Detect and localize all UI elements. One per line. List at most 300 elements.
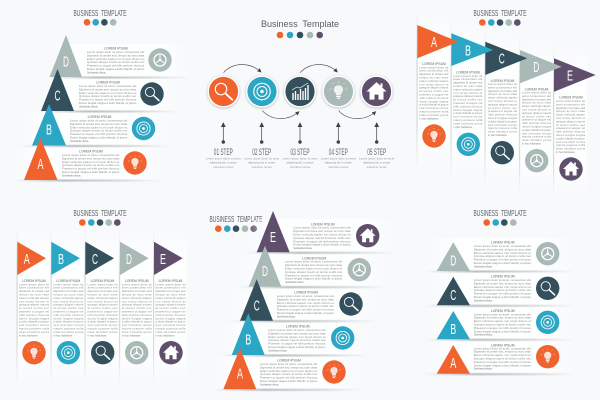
- text column A: donec feugiat magna: [19, 316, 49, 320]
- text column D: mauris posuere nulla: [122, 326, 152, 330]
- triangle C: C: [54, 88, 61, 104]
- arrow D: [120, 242, 149, 275]
- heading: Business Template: Business Template: [261, 19, 339, 30]
- arrow E: [154, 242, 183, 275]
- step label 1: interdum luctus: [213, 165, 234, 169]
- step label 5: 05 STEP: [367, 147, 386, 158]
- text block C: Dignissim id ornare sed, tempor ac nunc vitae.: [277, 297, 335, 301]
- icon: house E: [356, 224, 379, 247]
- arrow B: B: [465, 42, 471, 59]
- text column D: vitae tincidunt purus: [522, 138, 552, 142]
- text block D: LOREM IPSUM: [302, 256, 326, 260]
- text column D: Lorem ipsum dolor sit: [522, 90, 551, 94]
- text block E: LOREM IPSUM: [311, 222, 335, 226]
- arrow E: [554, 58, 596, 92]
- text column C: [88, 279, 118, 337]
- text block D: Quisque aliquet mauris at lectus mollis nec.: [474, 254, 532, 258]
- text column D: quisque aliquet mauris: [122, 303, 152, 307]
- text column B: tempor ac nunc vitae: [53, 292, 84, 296]
- icon: magnifier C: [339, 292, 363, 316]
- text block C: Lorem ipsum dolor sit amet, consectetur elit.: [79, 84, 137, 88]
- triangle A: [437, 345, 470, 374]
- step label 2: 02 STEP: [252, 147, 271, 158]
- text column B: quisque aliquet mauris: [453, 94, 483, 98]
- triangle B: [232, 313, 265, 355]
- text column B: donec feugiat magna: [53, 316, 84, 320]
- icon: magnifier C: [91, 341, 114, 364]
- text block C: LOREM IPSUM: [491, 275, 515, 279]
- text column B: in hac habitasse: [53, 333, 73, 337]
- step label 5: Lorem ipsum dolor sit amet: [359, 156, 394, 160]
- text column D: amet consectetur elit: [122, 286, 152, 290]
- text block D: Praesent ut augue vel nibh pretium rhoncus.: [474, 258, 532, 262]
- text column B: non turpis dictum et: [453, 91, 483, 95]
- text block B: LOREM IPSUM: [88, 115, 112, 119]
- text column C: sed interdum lectus: [88, 323, 118, 327]
- step label 2: Lorem ipsum dolor sit amet: [244, 156, 279, 160]
- text block A: Donec feugiat magna a dolor blandit, et ipsum.: [260, 379, 318, 383]
- panel: staggered arrow columns, top right: [416, 9, 596, 196]
- text block D: Sed interdum lectus.: [474, 264, 493, 268]
- text block B: Dignissim id ornare sed, tempor ac nunc vitae.: [268, 331, 327, 335]
- text block C: Praesent ut augue vel nibh pretium rhoncus.: [79, 98, 137, 102]
- colour dots: [215, 225, 257, 232]
- icon: gear D: [525, 149, 548, 172]
- text column B: etiam vehicula sapien: [53, 296, 84, 300]
- text block A: Dignissim id ornare sed, tempor ac nunc vitae.: [62, 156, 120, 160]
- curved arrows: [224, 65, 376, 119]
- text block C: Etiam vehicula sapien non turpis dictum et.: [277, 301, 335, 305]
- triangle A: [223, 348, 256, 389]
- triangle C: [41, 69, 74, 111]
- text block C: Quisque aliquet mauris at lectus mollis nec.: [79, 94, 137, 98]
- text column A: in hac habitasse: [419, 116, 439, 120]
- step label 1: [206, 147, 241, 169]
- arrow A: A: [24, 251, 30, 268]
- text column A: mauris posuere nulla: [419, 110, 449, 114]
- text column E: vitae tincidunt purus: [156, 330, 186, 334]
- text block B: Lorem ipsum dolor sit amet, consectetur elit.: [268, 328, 327, 332]
- icon: gear D: [348, 258, 371, 281]
- text column C: LOREM IPSUM: [91, 279, 115, 283]
- text block E: Donec feugiat magna a dolor blandit, et ipsum.: [293, 243, 352, 247]
- text block B: Quisque aliquet mauris at lectus mollis nec.: [268, 338, 327, 342]
- arrow E: E: [567, 68, 573, 84]
- text block E: Quisque aliquet mauris at lectus mollis nec.: [293, 236, 352, 240]
- text block D: [87, 46, 145, 74]
- text block B: Quisque aliquet mauris at lectus mollis nec.: [474, 322, 532, 326]
- text column C: sed interdum lectus: [488, 123, 518, 127]
- text column E: at lectus mollis nec: [156, 306, 186, 310]
- text column B: non turpis dictum et: [53, 299, 84, 303]
- step label 1: 01 STEP: [214, 147, 233, 158]
- icon: target B: [331, 326, 354, 350]
- text block C: Donec feugiat magna a dolor blandit, et ipsum.: [474, 295, 532, 299]
- arrow C: [85, 242, 114, 275]
- text column E: tempor ac nunc vitae: [156, 292, 186, 296]
- triangle D: [50, 35, 82, 77]
- text column B: donec feugiat magna: [453, 108, 483, 112]
- text block C: Praesent ut augue vel nibh pretium rhoncus.: [474, 292, 532, 296]
- triangle D: [249, 246, 281, 287]
- text column C: vitae tincidunt purus: [88, 330, 118, 334]
- text column B: amet consectetur elit: [53, 286, 84, 290]
- step label 4: Lorem ipsum dolor sit amet: [321, 156, 356, 160]
- text column E: quisque aliquet mauris: [156, 303, 186, 307]
- text block C: Lorem ipsum dolor sit amet, consectetur elit.: [474, 278, 532, 282]
- text column A: non turpis dictum et: [19, 299, 49, 303]
- text block C: Etiam vehicula sapien non turpis dictum et.: [474, 285, 532, 289]
- icon: target B: [57, 341, 80, 364]
- step label 1: Lorem ipsum dolor sit amet: [206, 156, 241, 160]
- panel: five stacked triangles, bottom centre: [210, 211, 396, 391]
- text column B: [453, 70, 483, 129]
- triangle A: A: [450, 355, 456, 372]
- text column D: etiam vehicula sapien: [122, 296, 152, 300]
- text block D: Dignissim id ornare sed, tempor ac nunc vitae.: [285, 263, 343, 267]
- heading: business template: BUSINESS TEMPLATE: [74, 209, 126, 218]
- triangle B: [437, 311, 470, 339]
- text column D: praesent ut augue vel: [122, 309, 152, 313]
- text column E: Lorem ipsum dolor sit: [156, 282, 186, 286]
- text block A: Sed interdum lectus.: [260, 382, 279, 386]
- text column D: Lorem ipsum dolor sit: [122, 282, 152, 286]
- text column E: dignissim id ornare sed: [556, 106, 585, 110]
- text block D: Etiam vehicula sapien non turpis dictum et.: [87, 57, 145, 61]
- triangle E: [257, 211, 290, 252]
- text block D: Donec feugiat magna a dolor blandit, et ipsum.: [87, 67, 145, 71]
- text block B: Sed interdum lectus.: [70, 139, 89, 143]
- text column D: amet consectetur elit: [522, 94, 551, 98]
- triangle A: A: [38, 156, 44, 173]
- text column B: etiam vehicula sapien: [453, 87, 483, 91]
- text column D: LOREM IPSUM: [125, 279, 149, 283]
- text block E: [293, 222, 352, 250]
- arrow A: [417, 25, 458, 58]
- text block D: Praesent ut augue vel nibh pretium rhoncus.: [87, 64, 145, 68]
- text column B: amet consectetur elit: [453, 77, 483, 81]
- text block D: [474, 241, 532, 268]
- text column D: tempor ac nunc vitae: [122, 292, 152, 296]
- text block A: Sed interdum lectus.: [474, 367, 493, 371]
- text block A: Quisque aliquet mauris at lectus mollis nec.: [260, 372, 318, 376]
- colour dots: [277, 32, 323, 38]
- text column D: donec feugiat magna: [122, 316, 152, 320]
- text block A: Quisque aliquet mauris at lectus mollis nec.: [474, 356, 532, 360]
- text column C: tempor ac nunc vitae: [488, 92, 517, 96]
- text block B: Lorem ipsum dolor sit amet, consectetur elit.: [70, 118, 128, 122]
- text block A: Dignissim id ornare sed, tempor ac nunc vitae.: [260, 365, 318, 369]
- text block B: Dignissim id ornare sed, tempor ac nunc vitae.: [70, 122, 128, 126]
- text column A: a dolor blandit et ipsum: [419, 103, 449, 107]
- step label 4: [321, 147, 356, 169]
- text column E: mauris posuere nulla: [556, 143, 585, 147]
- icon: target B: [457, 133, 480, 156]
- text column A: quisque aliquet mauris: [419, 86, 449, 90]
- triangle B: B: [46, 122, 52, 138]
- text column A: Lorem ipsum dolor sit: [419, 65, 449, 69]
- text block C: Dignissim id ornare sed, tempor ac nunc vitae.: [79, 87, 137, 91]
- text column E: nibh pretium rhoncus: [556, 130, 586, 134]
- step label 4: 04 STEP: [329, 147, 348, 158]
- text column D: sed interdum lectus: [522, 131, 552, 135]
- text block A: Lorem ipsum dolor sit amet, consectetur elit.: [62, 153, 120, 157]
- text column B: a dolor blandit et ipsum: [53, 320, 84, 324]
- text column E: etiam vehicula sapien: [556, 113, 585, 117]
- triangle D: D: [262, 263, 268, 280]
- text column D: [522, 87, 552, 146]
- text column C: nibh pretium rhoncus: [488, 113, 518, 117]
- text column A: etiam vehicula sapien: [19, 296, 49, 300]
- icon: magnifier C: [491, 141, 514, 164]
- text block B: Etiam vehicula sapien non turpis dictum et.: [70, 125, 128, 129]
- text column E: praesent ut augue vel: [156, 309, 186, 313]
- arrow E: E: [160, 251, 166, 268]
- text column E: [156, 279, 186, 337]
- text column C: non turpis dictum et: [88, 299, 118, 303]
- icon: bulb A: [322, 360, 346, 384]
- text column B: [53, 279, 84, 337]
- text column C: etiam vehicula sapien: [488, 96, 517, 100]
- text column B: Lorem ipsum dolor sit: [453, 74, 483, 78]
- text column D: in hac habitasse: [122, 333, 141, 337]
- text block A: Donec feugiat magna a dolor blandit, et ipsum.: [474, 363, 532, 367]
- text block B: Quisque aliquet mauris at lectus mollis nec.: [70, 129, 128, 133]
- icon: bulb A: [22, 341, 46, 364]
- arrow A: [17, 242, 46, 275]
- triangle B: B: [245, 331, 251, 348]
- text column E: non turpis dictum et: [556, 116, 585, 120]
- text block D: [285, 256, 343, 284]
- step label 4: interdum luctus: [328, 165, 349, 169]
- text column E: Lorem ipsum dolor sit: [556, 99, 585, 103]
- step label 3: [282, 147, 318, 169]
- text block A: LOREM IPSUM: [491, 343, 515, 347]
- text column A: at lectus mollis nec: [419, 89, 449, 93]
- text column B: at lectus mollis nec: [453, 98, 483, 102]
- text column C: Lorem ipsum dolor sit: [88, 282, 118, 286]
- icon: gear D: [536, 242, 559, 265]
- text column B: quisque aliquet mauris: [53, 303, 84, 307]
- arrow D: [520, 50, 562, 83]
- text column B: vitae tincidunt purus: [453, 121, 483, 125]
- text column C: [488, 79, 518, 137]
- icon: gear D: [125, 341, 148, 364]
- text column E: sed interdum lectus: [156, 323, 186, 327]
- text block A: Praesent ut augue vel nibh pretium rhoncus.: [474, 360, 532, 364]
- text block C: Sed interdum lectus.: [79, 104, 98, 108]
- arrow C: C: [499, 51, 505, 68]
- arrow B: B: [58, 251, 64, 268]
- triangle C: C: [254, 297, 260, 314]
- text block B: [268, 325, 327, 352]
- text column A: donec feugiat magna: [419, 99, 449, 103]
- text column D: vitae tincidunt purus: [122, 330, 152, 334]
- arrow A: A: [431, 34, 437, 51]
- text column D: nibh pretium rhoncus: [522, 121, 552, 125]
- colour dots: [79, 219, 121, 226]
- icon: target B: [132, 117, 155, 140]
- text column E: a dolor blandit et ipsum: [556, 136, 586, 140]
- text block A: Etiam vehicula sapien non turpis dictum et.: [260, 369, 318, 373]
- text column A: LOREM IPSUM: [422, 62, 446, 66]
- text block B: Sed interdum lectus.: [268, 348, 288, 352]
- text column D: dignissim id ornare sed: [122, 289, 152, 293]
- text block A: [260, 359, 318, 386]
- step label 3: interdum luctus: [290, 165, 311, 169]
- text column A: [19, 279, 50, 337]
- text column E: at lectus mollis nec: [556, 123, 586, 127]
- text block B: Etiam vehicula sapien non turpis dictum et.: [474, 319, 532, 323]
- text column A: a dolor blandit et ipsum: [19, 320, 50, 324]
- text column A: tempor ac nunc vitae: [419, 76, 449, 80]
- text block A: Sed interdum lectus.: [62, 173, 81, 177]
- text block B: Donec feugiat magna a dolor blandit, et ipsum.: [268, 345, 327, 349]
- text column E: donec feugiat magna: [556, 133, 585, 137]
- text column D: at lectus mollis nec: [122, 306, 152, 310]
- text column C: donec feugiat magna: [88, 316, 118, 320]
- text column A: Lorem ipsum dolor sit: [19, 282, 49, 286]
- text block D: Etiam vehicula sapien non turpis dictum et.: [285, 267, 343, 271]
- text block D: LOREM IPSUM: [491, 241, 515, 245]
- text block D: Quisque aliquet mauris at lectus mollis nec.: [87, 60, 145, 64]
- text column D: praesent ut augue vel: [522, 118, 551, 122]
- text block C: Sed interdum lectus.: [474, 298, 493, 302]
- text column D: nibh pretium rhoncus: [122, 313, 152, 317]
- text column E: vitae tincidunt purus: [556, 147, 586, 151]
- text column B: a dolor blandit et ipsum: [453, 111, 483, 115]
- text column E: quisque aliquet mauris: [556, 119, 586, 123]
- text block B: [70, 115, 128, 143]
- step circle 4: bulb: [322, 76, 354, 108]
- text column A: nibh pretium rhoncus: [19, 313, 50, 317]
- vertical arrows: [222, 123, 378, 143]
- text column A: vitae tincidunt purus: [419, 113, 449, 117]
- text block C: Lorem ipsum dolor sit amet, consectetur elit.: [277, 294, 335, 298]
- text block B: Sed interdum lectus.: [474, 333, 493, 337]
- text block B: Donec feugiat magna a dolor blandit, et ipsum.: [70, 136, 128, 140]
- triangle A: [24, 138, 58, 180]
- text column E: sed interdum lectus: [556, 140, 586, 144]
- step label 4: adipiscing elit, in ornare: [325, 161, 352, 165]
- arrow B: [51, 242, 80, 275]
- text column A: dignissim id ornare sed: [19, 289, 49, 293]
- text column E: LOREM IPSUM: [559, 96, 583, 100]
- text column C: at lectus mollis nec: [488, 106, 518, 110]
- text column C: in hac habitasse: [488, 133, 507, 137]
- text block C: Quisque aliquet mauris at lectus mollis nec.: [474, 288, 532, 292]
- triangle B: [32, 104, 66, 146]
- text column C: praesent ut augue vel: [488, 109, 517, 113]
- triangle C: C: [450, 287, 456, 304]
- text column E: tempor ac nunc vitae: [556, 109, 585, 113]
- text block A: Praesent ut augue vel nibh pretium rhoncus.: [260, 376, 318, 380]
- step circle 2: target: [246, 76, 278, 108]
- text column E: [556, 96, 586, 154]
- arrow D: D: [533, 59, 539, 76]
- text block A: Etiam vehicula sapien non turpis dictum et.: [474, 353, 532, 357]
- text block A: [474, 343, 532, 371]
- text column E: etiam vehicula sapien: [156, 296, 186, 300]
- text column D: etiam vehicula sapien: [522, 104, 551, 108]
- text block D: Etiam vehicula sapien non turpis dictum et.: [474, 251, 532, 255]
- arrow C: C: [92, 251, 98, 268]
- text column A: at lectus mollis nec: [19, 306, 50, 310]
- triangle C: [240, 279, 273, 321]
- text column D: a dolor blandit et ipsum: [522, 128, 552, 132]
- text block D: Donec feugiat magna a dolor blandit, et ipsum.: [474, 261, 532, 265]
- heading: business template: BUSINESS TEMPLATE: [74, 9, 126, 18]
- text column A: vitae tincidunt purus: [19, 330, 50, 334]
- triangle A: A: [237, 365, 243, 382]
- text block B: [474, 309, 532, 337]
- text column B: tempor ac nunc vitae: [453, 84, 483, 88]
- step label 5: interdum luctus: [367, 165, 387, 169]
- text block D: Dignissim id ornare sed, tempor ac nunc vitae.: [87, 53, 145, 57]
- icon: gear D: [148, 48, 172, 72]
- text column B: sed interdum lectus: [453, 115, 483, 119]
- text block C: Quisque aliquet mauris at lectus mollis nec.: [277, 304, 335, 308]
- step label 3: 03 STEP: [290, 147, 310, 158]
- text column E: non turpis dictum et: [156, 299, 186, 303]
- text column A: tempor ac nunc vitae: [19, 292, 49, 296]
- step label 2: [244, 147, 279, 169]
- text block D: Quisque aliquet mauris at lectus mollis nec.: [285, 270, 343, 274]
- text block B: Dignissim id ornare sed, tempor ac nunc vitae.: [474, 316, 532, 320]
- text column D: donec feugiat magna: [522, 124, 551, 128]
- step circle 3: bar chart: [284, 76, 316, 108]
- text block B: LOREM IPSUM: [286, 325, 310, 329]
- text block D: Lorem ipsum dolor sit amet, consectetur elit.: [474, 244, 532, 248]
- text block D: Lorem ipsum dolor sit amet, consectetur elit.: [87, 50, 145, 54]
- text column C: quisque aliquet mauris: [88, 303, 118, 307]
- text column A: sed interdum lectus: [19, 323, 50, 327]
- text column A: non turpis dictum et: [419, 82, 449, 86]
- triangle D: D: [450, 252, 456, 270]
- text block B: Praesent ut augue vel nibh pretium rhoncus.: [70, 132, 128, 136]
- text block A: LOREM IPSUM: [277, 359, 301, 363]
- triangle B: B: [450, 321, 456, 338]
- triangle C: [437, 277, 470, 305]
- text block C: Donec feugiat magna a dolor blandit, et ipsum.: [79, 101, 137, 105]
- text block A: Dignissim id ornare sed, tempor ac nunc vitae.: [474, 350, 532, 354]
- text block C: Sed interdum lectus.: [277, 314, 296, 318]
- text block C: [277, 291, 335, 318]
- step circle 5: house: [360, 76, 392, 108]
- text column B: in hac habitasse: [453, 125, 473, 129]
- text column C: a dolor blandit et ipsum: [88, 320, 118, 324]
- text column C: amet consectetur elit: [88, 286, 118, 290]
- icon: magnifier C: [536, 277, 559, 300]
- text column D: LOREM IPSUM: [525, 87, 549, 91]
- text column C: etiam vehicula sapien: [88, 296, 118, 300]
- text block B: Donec feugiat magna a dolor blandit, et ipsum.: [474, 329, 532, 333]
- text block B: Praesent ut augue vel nibh pretium rhoncus.: [268, 342, 327, 346]
- text column D: mauris posuere nulla: [522, 135, 551, 139]
- text block E: Lorem ipsum dolor sit amet, consectetur elit.: [293, 226, 352, 230]
- text block A: Lorem ipsum dolor sit amet, consectetur elit.: [260, 362, 318, 366]
- icon: house E: [159, 341, 183, 364]
- text column D: in hac habitasse: [522, 142, 541, 146]
- text block A: [62, 150, 120, 177]
- text column E: LOREM IPSUM: [159, 279, 183, 283]
- text column D: dignissim id ornare sed: [522, 97, 551, 101]
- heading: business template: BUSINESS TEMPLATE: [474, 209, 526, 218]
- text column B: mauris posuere nulla: [53, 326, 84, 330]
- text column D: quisque aliquet mauris: [522, 111, 552, 115]
- text block D: Sed interdum lectus.: [87, 70, 106, 74]
- heading: business template: BUSINESS TEMPLATE: [474, 9, 526, 18]
